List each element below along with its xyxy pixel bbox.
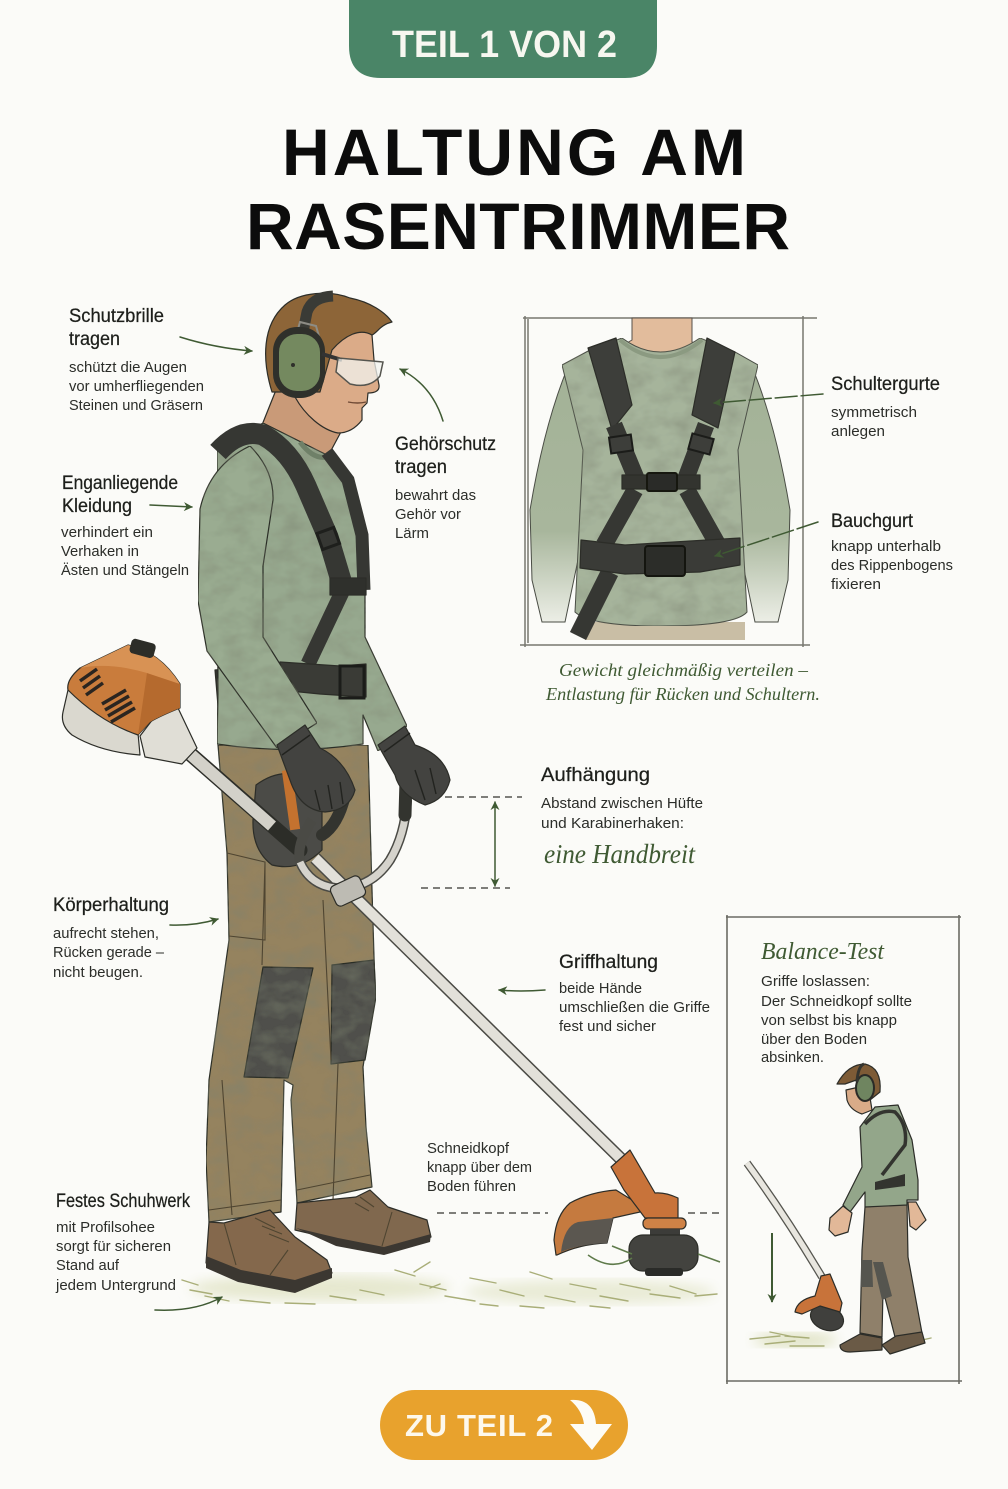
balance panel: instructions: von selbst bis knapp: [761, 1012, 897, 1029]
illustration: trimmer: [62, 638, 720, 1276]
illustration: ground grass under the main figure: [182, 1262, 717, 1308]
callout: Griffhaltung: [559, 952, 710, 1035]
balance panel: instructions: Der Schneidkopf sollte: [761, 993, 912, 1010]
harness panel: sketch frame: [520, 316, 817, 647]
trimmer: cutting head: [554, 1150, 720, 1276]
panel: balance test: [726, 915, 962, 1384]
callout: Gehörschutz: bewahrt das: [395, 487, 476, 504]
callout: Schneidkopf: Schneidkopf: [427, 1140, 510, 1157]
callout: Schneidkopf: Boden führen: [427, 1178, 516, 1195]
callout: Festes Schuhwerk: Festes Schuhwerk: [56, 1191, 190, 1212]
arrow: Körperhaltung: [170, 919, 218, 925]
arrow: Schultergurte: [714, 394, 823, 403]
icon: curved down arrow: [570, 1400, 612, 1450]
worker: hip pad: [253, 774, 322, 867]
callout: Schneidkopf: knapp über dem: [427, 1159, 532, 1176]
harness panel: collar: [620, 340, 702, 357]
button: to part 2: [380, 1390, 628, 1460]
callout: Schutzbrille: [69, 306, 204, 414]
worker: harness: [218, 433, 366, 698]
callout: Gehörschutz: [395, 434, 496, 542]
callout: Aufhängung: und Karabinerhaken:: [541, 815, 684, 832]
callout: Körperhaltung: nicht beugen.: [53, 964, 143, 981]
title: HALTUNG AM: [282, 115, 746, 189]
balance panel: down arrow: [771, 1233, 773, 1302]
caption: weight distribution: Entlastung für Rücken und Schultern.: [545, 684, 820, 704]
callout: Körperhaltung: Körperhaltung: [53, 895, 169, 916]
callout: Schutzbrille: schützt die Augen: [69, 359, 187, 376]
callout: Gehörschutz: Gehör vor: [395, 506, 461, 523]
callout: Enganliegende Kleidung: [61, 473, 189, 579]
callout: Schneidkopf: [427, 1140, 532, 1195]
balance panel: shaft: [747, 1163, 822, 1277]
worker: boots: [206, 1190, 431, 1293]
callout: Enganliegende Kleidung: Enganliegende: [62, 473, 178, 494]
worker: right glove: [378, 726, 450, 805]
arrow: Schutzbrille: [180, 337, 252, 351]
banner: part 1 of 2: TEIL 1 VON 2: [392, 24, 617, 66]
measure: one hand width: [421, 797, 522, 888]
caption: weight distribution: Gewicht gleichmäßig verteilen –: [559, 660, 809, 680]
arrow: Griffhaltung: [499, 990, 545, 991]
balance panel: instructions: Griffe loslassen:: [761, 973, 870, 990]
callout: Gehörschutz: Gehörschutz: [395, 434, 496, 455]
trimmer: rear shaft: [180, 745, 300, 850]
arrow: Bauchgurt: [715, 522, 818, 556]
caption: weight distribution: [545, 660, 820, 704]
balance panel: instructions: [761, 973, 912, 1066]
arrow: Kleidung: [150, 505, 192, 507]
arrow: Schuhwerk: [155, 1297, 222, 1310]
worker: arm: [198, 446, 317, 748]
callout: Griffhaltung: umschließen die Griffe: [559, 999, 710, 1016]
callout: Enganliegende Kleidung: Ästen und Stängeln: [61, 562, 189, 579]
banner: part 1 of 2: [349, 0, 657, 78]
worker: collar: [300, 442, 330, 457]
balance panel: sketch frame: [726, 915, 962, 1384]
trimmer: engine cover: [62, 638, 197, 764]
harness panel: sleeves: [530, 362, 790, 622]
callout: Bauchgurt: Bauchgurt: [831, 511, 914, 532]
callout: Körperhaltung: Rücken gerade –: [53, 944, 165, 961]
illustration: main worker: [198, 293, 431, 1293]
callout: Schultergurte: [831, 374, 940, 440]
harness panel: neck: [618, 318, 708, 362]
title: [246, 115, 790, 263]
balance panel: heading: Balance-Test: [761, 939, 885, 965]
callout: Gehörschutz: Lärm: [395, 525, 429, 542]
arrow: Gehörschutz: [400, 369, 443, 421]
worker: shirt torso: [217, 423, 407, 751]
callout: Gehörschutz: tragen: [395, 457, 447, 478]
callout: Schultergurte: Schultergurte: [831, 374, 940, 395]
callout: Aufhängung: eine Handbreit: [544, 839, 696, 869]
callout: Aufhängung: Abstand zwischen Hüfte: [541, 795, 703, 812]
callout: Schutzbrille: Steinen und Gräsern: [69, 397, 203, 414]
callout: Bauchgurt: [831, 511, 953, 593]
callout: Festes Schuhwerk: [55, 1191, 190, 1294]
callout: Schultergurte: symmetrisch: [831, 404, 917, 421]
worker: rear belt pad: [215, 668, 240, 706]
harness panel: straps: [578, 338, 740, 636]
worker: neck and face: [262, 293, 392, 458]
worker: left glove: [277, 725, 355, 812]
trimmer: main shaft: [315, 858, 622, 1160]
worker: safety glasses: [322, 354, 383, 385]
callout: Bauchgurt: fixieren: [831, 576, 881, 593]
callout: Körperhaltung: [53, 895, 169, 981]
callout: Schutzbrille: tragen: [69, 329, 120, 350]
balance panel: small worker: [829, 1064, 926, 1354]
callout: Bauchgurt: knapp unterhalb: [831, 538, 941, 555]
callout: Enganliegende Kleidung: Kleidung: [62, 496, 132, 517]
title: RASENTRIMMER: [246, 189, 790, 263]
callout: Festes Schuhwerk: Stand auf: [56, 1257, 120, 1274]
balance panel: cutting head: [795, 1274, 847, 1335]
callout: Griffhaltung: beide Hände: [559, 980, 642, 997]
callout: Schutzbrille: vor umherfliegenden: [69, 378, 204, 395]
callout: Festes Schuhwerk: mit Profilsohee: [56, 1219, 155, 1236]
callout: Bauchgurt: des Rippenbogens: [831, 557, 953, 574]
panel: harness detail: [520, 316, 817, 647]
callout: Schultergurte: anlegen: [831, 423, 885, 440]
balance panel: grass: [750, 1332, 931, 1347]
callout: Schutzbrille: Schutzbrille: [69, 306, 164, 327]
measure: ground clearance line: [437, 1212, 719, 1214]
balance panel: instructions: absinken.: [761, 1049, 824, 1066]
callout: Festes Schuhwerk: jedem Untergrund: [55, 1277, 176, 1294]
callout: Griffhaltung: Griffhaltung: [559, 952, 658, 973]
callout: Körperhaltung: aufrecht stehen,: [53, 925, 159, 942]
callout: Aufhängung: [541, 765, 703, 869]
worker: ear protection: [273, 296, 333, 398]
balance panel: instructions: über den Boden: [761, 1031, 867, 1048]
callout: Aufhängung: Aufhängung: [541, 765, 650, 786]
harness panel: shirt: [562, 338, 758, 626]
callout: Enganliegende Kleidung: verhindert ein: [61, 524, 153, 541]
callout: Enganliegende Kleidung: Verhaken in: [61, 543, 139, 560]
harness panel: trousers: [585, 622, 745, 640]
trimmer: handle bar: [299, 800, 407, 888]
callout: Festes Schuhwerk: sorgt für sicheren: [56, 1238, 171, 1255]
button: to part 2: ZU TEIL 2: [405, 1408, 553, 1443]
callout: Griffhaltung: fest und sicher: [559, 1018, 656, 1035]
worker: trousers: [206, 745, 376, 1222]
